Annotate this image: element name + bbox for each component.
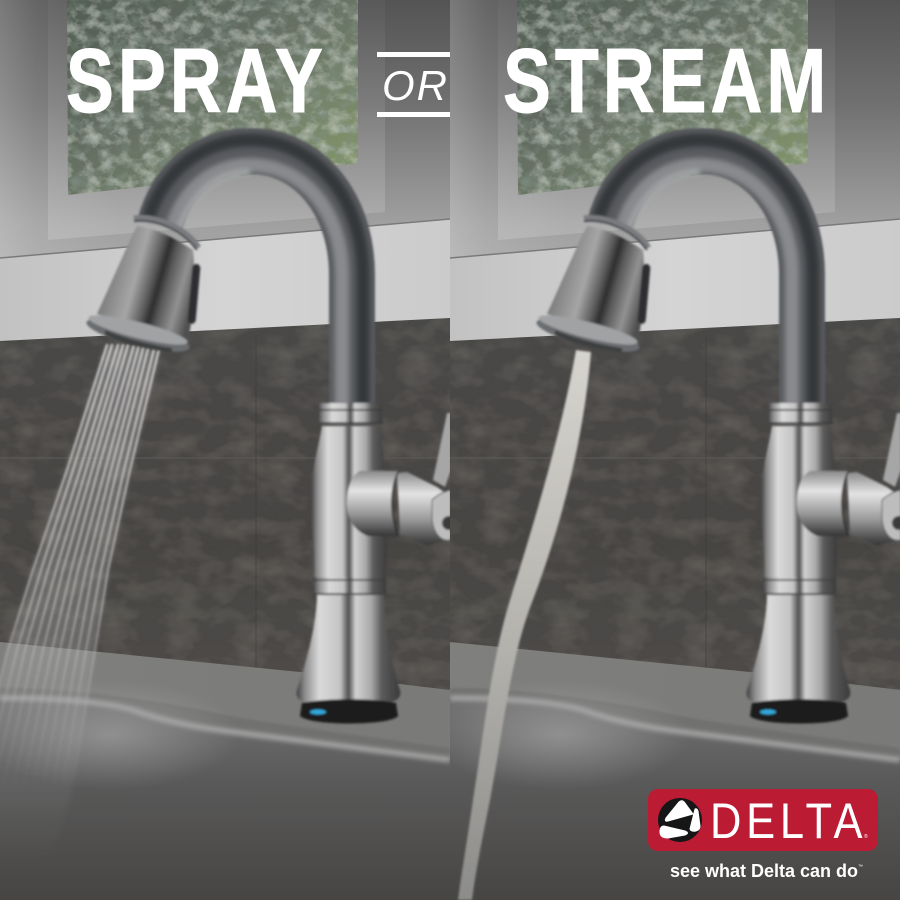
- logo wordmark: DELTA: [710, 793, 867, 849]
- panel: spray: [0, 0, 456, 900]
- spray water jets: [0, 342, 162, 788]
- kitchen background: [0, 0, 450, 900]
- stream of water: [458, 350, 591, 900]
- trademark mark: ™: [858, 864, 863, 870]
- heading: SPRAY: SPRAY: [66, 31, 327, 132]
- panel: stream: [430, 0, 900, 900]
- logo red badge: [648, 789, 878, 851]
- registered mark: ®: [864, 833, 868, 840]
- faucet: [84, 140, 456, 724]
- kitchen background: [430, 0, 900, 900]
- logo: Delta: [648, 789, 878, 881]
- tagline: see what Delta can do: [670, 861, 858, 881]
- faucet: [534, 140, 900, 724]
- icon: Delta triangle emblem: [658, 798, 702, 842]
- heading: OR: [377, 52, 450, 117]
- heading: STREAM: STREAM: [503, 31, 830, 132]
- heading: OR: OR: [382, 62, 449, 109]
